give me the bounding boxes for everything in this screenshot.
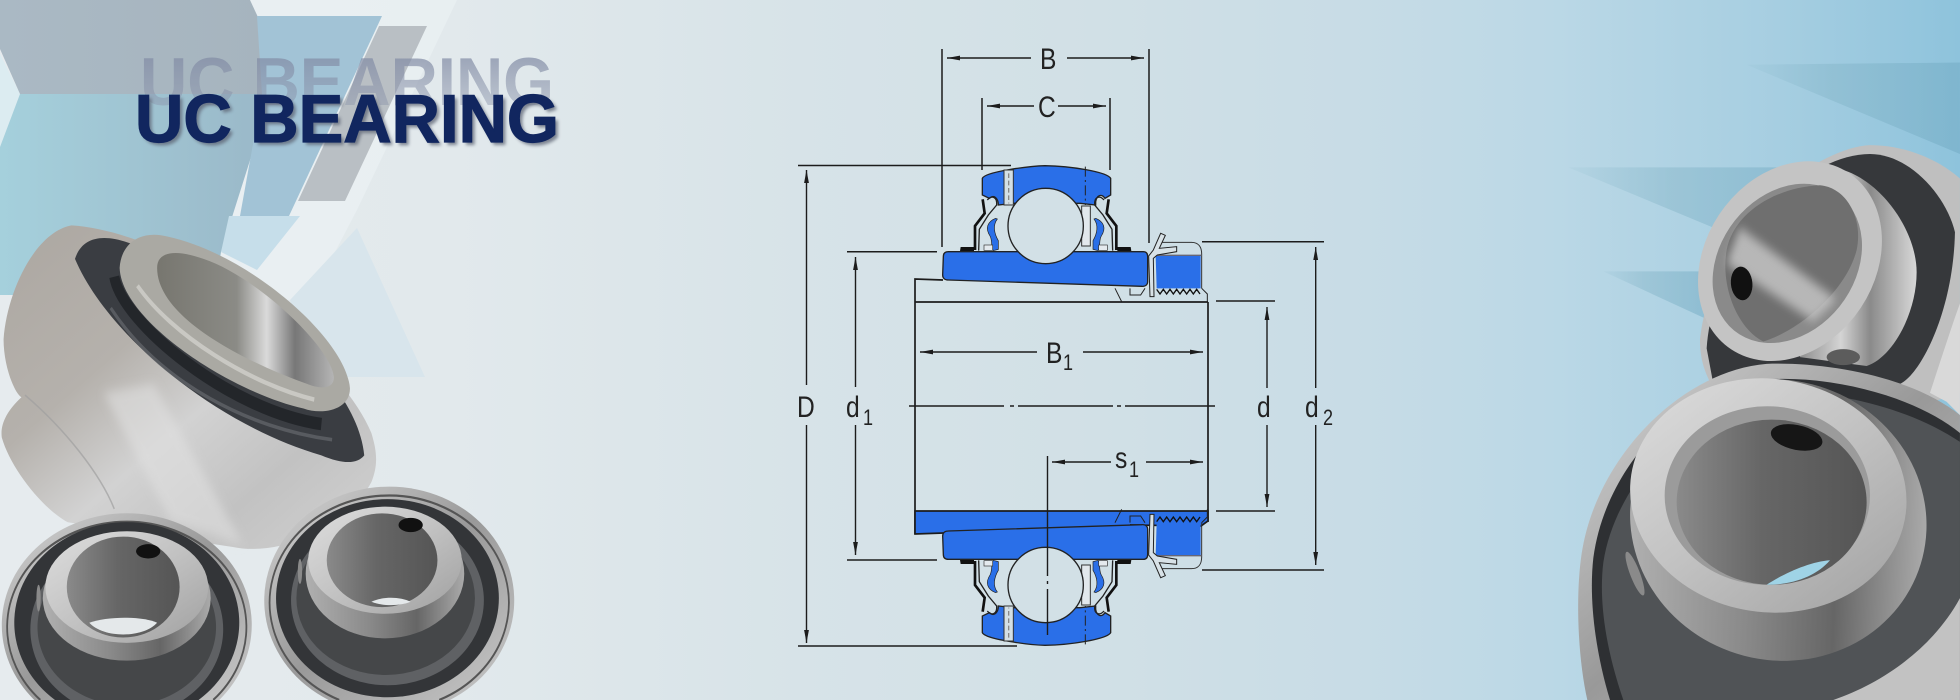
dimension s1: s xyxy=(1115,441,1127,475)
dimension D: D xyxy=(797,390,815,424)
photo: right bearings xyxy=(1578,126,1960,700)
top bearing section xyxy=(943,166,1207,302)
dimension d1: d xyxy=(846,390,860,424)
front bearing xyxy=(1578,364,1960,700)
diagram: bearing section xyxy=(797,42,1333,646)
dimension d2 xyxy=(1202,242,1333,570)
title text: UC BEARING xyxy=(135,81,559,157)
dimension B xyxy=(942,42,1149,247)
dimension B: B xyxy=(1040,42,1056,76)
small bearing bottom centre xyxy=(264,487,514,700)
photo: left bearings xyxy=(2,225,514,700)
dimension B1 xyxy=(920,336,1203,375)
dimension d: d xyxy=(1257,390,1271,424)
small bearing bottom left xyxy=(2,513,252,700)
dimension B1: B xyxy=(1046,336,1062,370)
dimension C xyxy=(982,90,1110,170)
dimension d1 xyxy=(846,252,937,560)
bottom bearing section xyxy=(943,509,1207,645)
centre line xyxy=(909,405,1215,407)
dimension C: C xyxy=(1038,90,1056,124)
dimension s1: 1 xyxy=(1129,458,1139,482)
dimension B1: 1 xyxy=(1063,351,1073,375)
dimension D xyxy=(797,166,1017,646)
background geometric shapes left xyxy=(0,0,457,377)
title shadow echo: UC BEARING xyxy=(140,44,554,120)
dimension d1: 1 xyxy=(863,406,873,430)
rear tilted bearing xyxy=(1675,126,1960,415)
shaft lower wall xyxy=(915,511,1208,534)
title shadow: UC BEARING xyxy=(138,84,562,160)
shaft outline xyxy=(915,279,1208,534)
dimension d xyxy=(1216,301,1275,511)
large tilted bearing xyxy=(2,225,376,549)
dimension d2: 2 xyxy=(1323,406,1333,430)
decorative shapes right xyxy=(1568,62,1960,319)
dimension s1 xyxy=(1048,441,1203,635)
title xyxy=(135,44,562,160)
dimension d2: d xyxy=(1305,390,1319,424)
